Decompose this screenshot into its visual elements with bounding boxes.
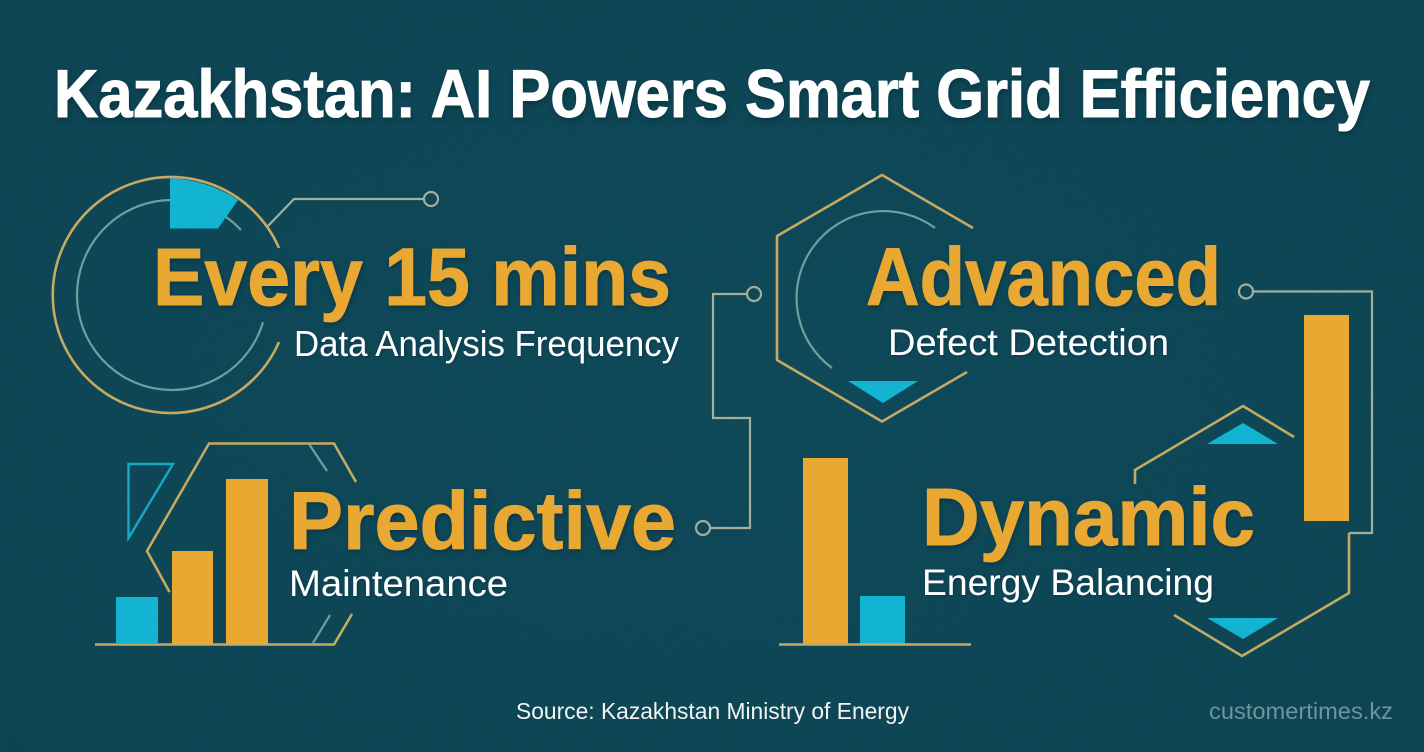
heading: Advanced: Advanced (866, 232, 1221, 323)
icon: cyan gauge segment (170, 178, 238, 228)
label: Maintenance: Maintenance (289, 563, 508, 604)
watermark: customertimes.kz (1209, 698, 1393, 724)
panel: energy balancing (779, 284, 1372, 656)
label: Defect Detection: Defect Detection (888, 322, 1169, 363)
panel: data analysis frequency (53, 177, 679, 413)
icon: hexagon frame (95, 444, 356, 644)
icon: outer ring (53, 177, 279, 413)
icon: cyan up triangle (1207, 423, 1278, 444)
icon: inner arc (797, 211, 935, 368)
icon: cyan triangle (848, 381, 918, 403)
icon: cyan down triangle (1207, 618, 1278, 639)
label: Energy Balancing: Energy Balancing (922, 562, 1214, 603)
heading: Predictive: Predictive (289, 476, 676, 567)
icon: teal ticks (309, 444, 330, 643)
icon: hexagon frame (1135, 406, 1349, 656)
connector with node (268, 192, 438, 226)
heading: Dynamic: Dynamic (922, 472, 1255, 563)
panel: predictive maintenance (95, 444, 676, 644)
bar chart (116, 479, 268, 644)
icon: cyan triangle outline (128, 464, 173, 538)
heading: Every 15 mins: Every 15 mins (153, 232, 671, 323)
source: Source: Kazakhstan Ministry of Energy (516, 698, 909, 724)
label: Data Analysis Frequency: Data Analysis Frequency (294, 323, 679, 364)
panel: defect detection (777, 175, 1221, 422)
icon: inner ring (77, 200, 263, 390)
connector with node (1239, 284, 1372, 533)
connector between left and right panels (696, 287, 761, 535)
bar chart (779, 315, 1349, 644)
icon: hexagon frame (777, 175, 973, 422)
